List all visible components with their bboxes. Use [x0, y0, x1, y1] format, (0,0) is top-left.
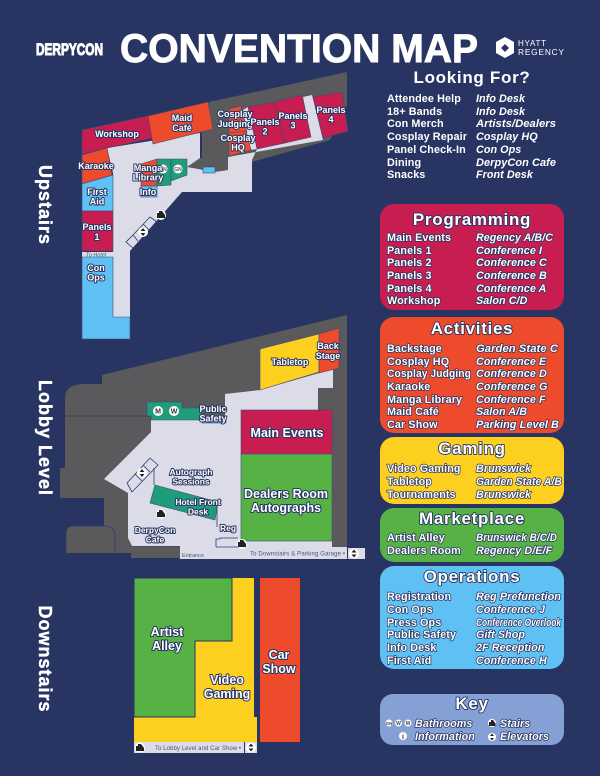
- label: Back Stage: Stage: [316, 351, 340, 361]
- label: Public Safety: Public: [199, 404, 227, 414]
- icon: restroom: GN: [159, 167, 167, 173]
- panel: Marketplace: Dealers Room: [387, 545, 461, 557]
- icon: stairs entrance: [237, 539, 247, 549]
- label: To Downstairs and Parking Garage: To Downstairs & Parking Garage •: [250, 552, 345, 558]
- label: Maid Cafe: Maid: [172, 113, 192, 123]
- heading: Gaming: Gaming: [438, 439, 506, 458]
- panel: Activities: Conference E: [476, 356, 547, 368]
- label: Panels 1: Panels: [82, 222, 112, 232]
- icon: elevator key: [488, 733, 496, 741]
- panel: Looking For: Info Desk: [476, 93, 526, 105]
- panel: Operations: Public Safety: [387, 629, 456, 641]
- room: Maid Cafe: [148, 102, 213, 144]
- panel: Activities: Manga Library: [387, 394, 462, 406]
- heading: Operations: Operations: [424, 567, 520, 586]
- label: Panels 3: 3: [290, 120, 296, 130]
- panel: Looking For: Attendee Help: [387, 93, 461, 105]
- map: downstairs: [134, 578, 300, 753]
- heading: Key: Key: [455, 694, 489, 713]
- panel: Looking For: Con Merch: [387, 118, 444, 130]
- side label: Lobby Level: Lobby Level: [35, 380, 55, 496]
- panel: Looking For: Con Ops: [476, 144, 521, 156]
- icon: restroom: [158, 164, 168, 174]
- label: Artist Alley: Artist: [151, 625, 183, 639]
- label: Elevators: Elevators: [500, 731, 549, 743]
- room: Panels 3: [274, 95, 311, 143]
- label: To Hotel: To Hotel: [86, 252, 106, 258]
- icon: women's restroom: [169, 406, 179, 416]
- label: First Aid: First: [87, 187, 107, 197]
- label: Artist Alley: Alley: [152, 639, 182, 653]
- room: Panels 4: [313, 92, 348, 138]
- room: Tabletop: [260, 334, 319, 390]
- panel: Programming: Panels 2: [387, 257, 432, 269]
- room: Public Safety: [202, 420, 226, 423]
- panel: Gaming: Tabletop: [387, 476, 432, 488]
- panel: Activities: Car Show: [387, 419, 438, 431]
- room: Manga Library: [141, 159, 157, 186]
- label: Con Ops: Ops: [87, 272, 105, 282]
- label: Panels 4: Panels: [316, 105, 346, 115]
- label: First Aid: Aid: [90, 196, 104, 206]
- label: Car Show: Show: [262, 662, 296, 676]
- panel: Operations: Press Ops: [387, 617, 441, 629]
- panel: Gaming: Video Gaming: [387, 463, 461, 475]
- icon: men's restroom: M: [155, 408, 161, 416]
- icon: restroom second: GN: [174, 167, 182, 173]
- label: Panels 3: Panels: [278, 111, 308, 121]
- label: To Lobby Level and Car Show: To Lobby Level and Car Show •: [155, 746, 241, 752]
- panel: Programming: [380, 204, 564, 310]
- room: Con Ops: [82, 257, 130, 339]
- elevator strip: [348, 548, 365, 559]
- room: Cosplay Judging: [229, 106, 247, 133]
- icon: women's bathroom: [395, 720, 402, 727]
- room: Panels 2: [248, 102, 285, 149]
- panel: Operations: Info Desk: [387, 642, 437, 654]
- label: Tabletop: Tabletop: [272, 357, 309, 367]
- icon: women's bathroom: W: [396, 721, 401, 727]
- heading: Marketplace: Marketplace: [419, 509, 525, 528]
- panel: Gaming: Brunswick: [476, 463, 532, 475]
- panel: Marketplace: Regency D/E/F: [476, 545, 553, 557]
- label: Hotel Front Desk: Hotel Front: [175, 497, 221, 507]
- panel: Activities: [380, 317, 564, 433]
- panel: Programming: Conference I: [476, 245, 543, 257]
- panel: Operations: Conference Overlook: [476, 617, 562, 629]
- label: Workshop: Workshop: [95, 129, 139, 139]
- label: Cosplay HQ: HQ: [231, 142, 245, 152]
- map: upstairs: [78, 72, 348, 339]
- room: Hotel Front Desk: [150, 485, 218, 520]
- label: Public Safety: Safety: [199, 414, 227, 424]
- panel: Operations: Registration: [387, 591, 451, 603]
- panel: Looking For: DerpyCon Cafe: [476, 157, 556, 169]
- label: Manga Library: Manga: [134, 163, 162, 173]
- logo: Hyatt Regency: HYATT: [518, 39, 546, 48]
- panel: Operations: Gift Shop: [476, 629, 525, 641]
- room: Panels 1: [82, 211, 113, 251]
- room: First Aid: [82, 175, 113, 211]
- panel: Marketplace: [380, 508, 564, 562]
- panel: Operations: Conference H: [476, 655, 547, 667]
- elevator frame: [126, 217, 157, 248]
- panel: Programming: Conference C: [476, 257, 547, 269]
- label: Maid Cafe: Café: [172, 123, 192, 133]
- room: Car Show: [260, 578, 300, 742]
- label: Panels 2: 2: [262, 126, 268, 136]
- panel: Looking For: 18+ Bands: [387, 106, 442, 118]
- panel: Activities: Parking Level B: [476, 419, 559, 431]
- elevator strip: [245, 742, 257, 753]
- icon: stairs lobby: [156, 509, 166, 519]
- side label: Upstairs: Upstairs: [35, 165, 55, 245]
- panel: Looking For: Front Desk: [476, 169, 534, 181]
- label: Info: Info: [140, 187, 157, 197]
- panel: Looking For: [387, 68, 556, 181]
- icon: stairs key: [488, 719, 496, 727]
- label: Information: Information: [415, 731, 475, 743]
- icon: gender-neutral bathroom: GN: [386, 721, 392, 726]
- panel: Gaming: Brunswick: [476, 489, 532, 501]
- panel: Looking For: Artists/Dealers: [475, 118, 556, 130]
- room: Cosplay HQ: [229, 131, 251, 156]
- icon: restroom second: [174, 164, 182, 174]
- panel: Programming: Main Events: [387, 232, 451, 244]
- map: lobby level: [60, 315, 365, 559]
- icon: information: i: [402, 734, 404, 741]
- logo: Hyatt Regency: REGENCY: [518, 47, 564, 57]
- icon: women's restroom: W: [171, 408, 178, 416]
- panel: Gaming: Garden State A/B: [476, 476, 562, 488]
- panel: Marketplace: Artist Alley: [387, 532, 445, 544]
- label: Main Events: Main Events: [251, 426, 324, 440]
- label: DerpyCon Cafe: DerpyCon: [135, 525, 175, 535]
- room: small operations closet: [203, 167, 215, 173]
- label: Bathrooms: Bathrooms: [415, 718, 472, 730]
- label: Dealers Room Autographs: Dealers Room: [244, 487, 328, 501]
- panel: Operations: Con Ops: [387, 604, 433, 616]
- logo: Hyatt Regency: [496, 37, 564, 58]
- panel: Looking For: Cosplay HQ: [476, 131, 538, 143]
- icon: elevator downstairs: [246, 742, 256, 752]
- panel: Looking For: Info Desk: [476, 106, 526, 118]
- panel: Operations: Conference J: [476, 604, 546, 616]
- room: Workshop: [82, 116, 153, 154]
- heading: Looking For: Looking For?: [414, 68, 530, 87]
- icon: men's bathroom: M: [406, 721, 410, 727]
- label: Video Gaming: Gaming: [204, 687, 250, 701]
- panel: Gaming: [380, 437, 564, 504]
- icon: elevator: [138, 227, 148, 237]
- panel: Programming: Salon C/D: [476, 295, 528, 307]
- label: DerpyCon Cafe: Cafe: [146, 534, 164, 544]
- strip: To Lobby Level: [134, 742, 244, 753]
- label: Cosplay HQ: Cosplay: [220, 133, 256, 143]
- panel: Activities: Cosplay Judging: [387, 368, 471, 380]
- label: Dealers Room Autographs: Autographs: [251, 501, 321, 515]
- room: Back Stage: [319, 328, 339, 373]
- heading: Programming: Programming: [413, 210, 531, 229]
- panel: Looking For: Dining: [387, 157, 421, 169]
- label: Hotel Front Desk: Desk: [188, 506, 208, 516]
- panel: Looking For: Panel Check-In: [387, 144, 466, 156]
- icon: gender-neutral bathroom: [386, 720, 392, 726]
- label: Car Show: Car: [269, 648, 289, 662]
- label: Entrance: Entrance: [182, 553, 204, 559]
- panel: Activities: Conference D: [476, 368, 547, 380]
- label: Back Stage: Back: [317, 341, 339, 351]
- panel: Programming: Panels 4: [387, 283, 432, 295]
- room: restroom two: [171, 159, 187, 181]
- side label: Downstairs: Downstairs: [35, 605, 55, 713]
- icon: information: [399, 732, 407, 741]
- icon: men's restroom: [153, 406, 163, 416]
- icon: stairs downstairs: [135, 742, 145, 752]
- panel: Activities: Salon A/B: [476, 406, 527, 418]
- panel: Programming: Conference A: [476, 283, 547, 295]
- panel: Activities: Cosplay HQ: [387, 356, 449, 368]
- panel: Programming: Regency A/B/C: [476, 232, 553, 244]
- label: Reg: Reg: [220, 523, 236, 533]
- room: restrooms M and W: [147, 402, 202, 420]
- label: Cosplay Judging: Cosplay: [217, 109, 253, 119]
- panel: Programming: Panels 3: [387, 270, 432, 282]
- label: Cosplay Judging: Judging: [218, 119, 252, 129]
- room: Main Events: [241, 410, 332, 454]
- walls and elevator frame: [127, 458, 240, 547]
- title: CONVENTION MAP: [120, 27, 478, 71]
- icon: men's bathroom: [404, 720, 412, 727]
- icon: elevator lobby: [137, 468, 147, 478]
- label: Manga Library: Library: [133, 172, 163, 182]
- label: Panels 1: 1: [94, 232, 100, 242]
- room: Dealers Room: [241, 454, 332, 541]
- panel: Looking For: Snacks: [387, 169, 425, 181]
- room: Info: [141, 186, 157, 197]
- room: Artist Alley: [134, 578, 232, 717]
- panel: Activities: Backstage: [387, 343, 442, 355]
- room: Video Gaming: [134, 578, 257, 742]
- label: Autograph Sessions: Autograph: [170, 467, 212, 477]
- heading: Activities: Activities: [431, 319, 513, 338]
- panel: Programming: Workshop: [387, 295, 441, 307]
- panel: Programming: Panels 1: [387, 245, 432, 257]
- label: Panels 4: 4: [328, 114, 334, 124]
- label: Video Gaming: Video: [210, 673, 244, 687]
- label: Con Ops: Con: [87, 263, 105, 273]
- panel: Activities: Garden State C: [476, 343, 558, 355]
- icon: elevator entrance: [349, 548, 359, 558]
- panel: Activities: Maid Café: [387, 406, 439, 418]
- logo: DerpyCon: DERPYCON: [36, 40, 103, 59]
- panel: Operations: 2F Reception: [475, 642, 545, 654]
- panel: Operations: Reg Prefunction: [476, 591, 561, 603]
- panel: Activities: Karaoke: [387, 381, 430, 393]
- panel: Programming: Conference B: [476, 270, 547, 282]
- panel: Marketplace: Brunswick B/C/D: [476, 532, 557, 544]
- label: Autograph Sessions: Sessions: [172, 476, 210, 486]
- panel: Activities: Conference F: [476, 394, 546, 406]
- panel: Operations: First Aid: [387, 655, 431, 667]
- room: restroom one: [157, 159, 171, 186]
- strip: To Hotel: [82, 252, 113, 257]
- panel: Gaming: Tournaments: [387, 489, 456, 501]
- label: Karaoke: Karaoke: [78, 161, 114, 171]
- panel: Operations: [380, 566, 564, 669]
- room: Karaoke: [82, 148, 112, 184]
- label: Panels 2: Panels: [250, 117, 280, 127]
- panel: Looking For: Cosplay Repair: [387, 131, 468, 143]
- label: Stairs: Stairs: [500, 718, 530, 730]
- panel: Activities: Conference G: [476, 381, 548, 393]
- panel: Key: [380, 694, 564, 745]
- icon: stairs: [156, 210, 166, 220]
